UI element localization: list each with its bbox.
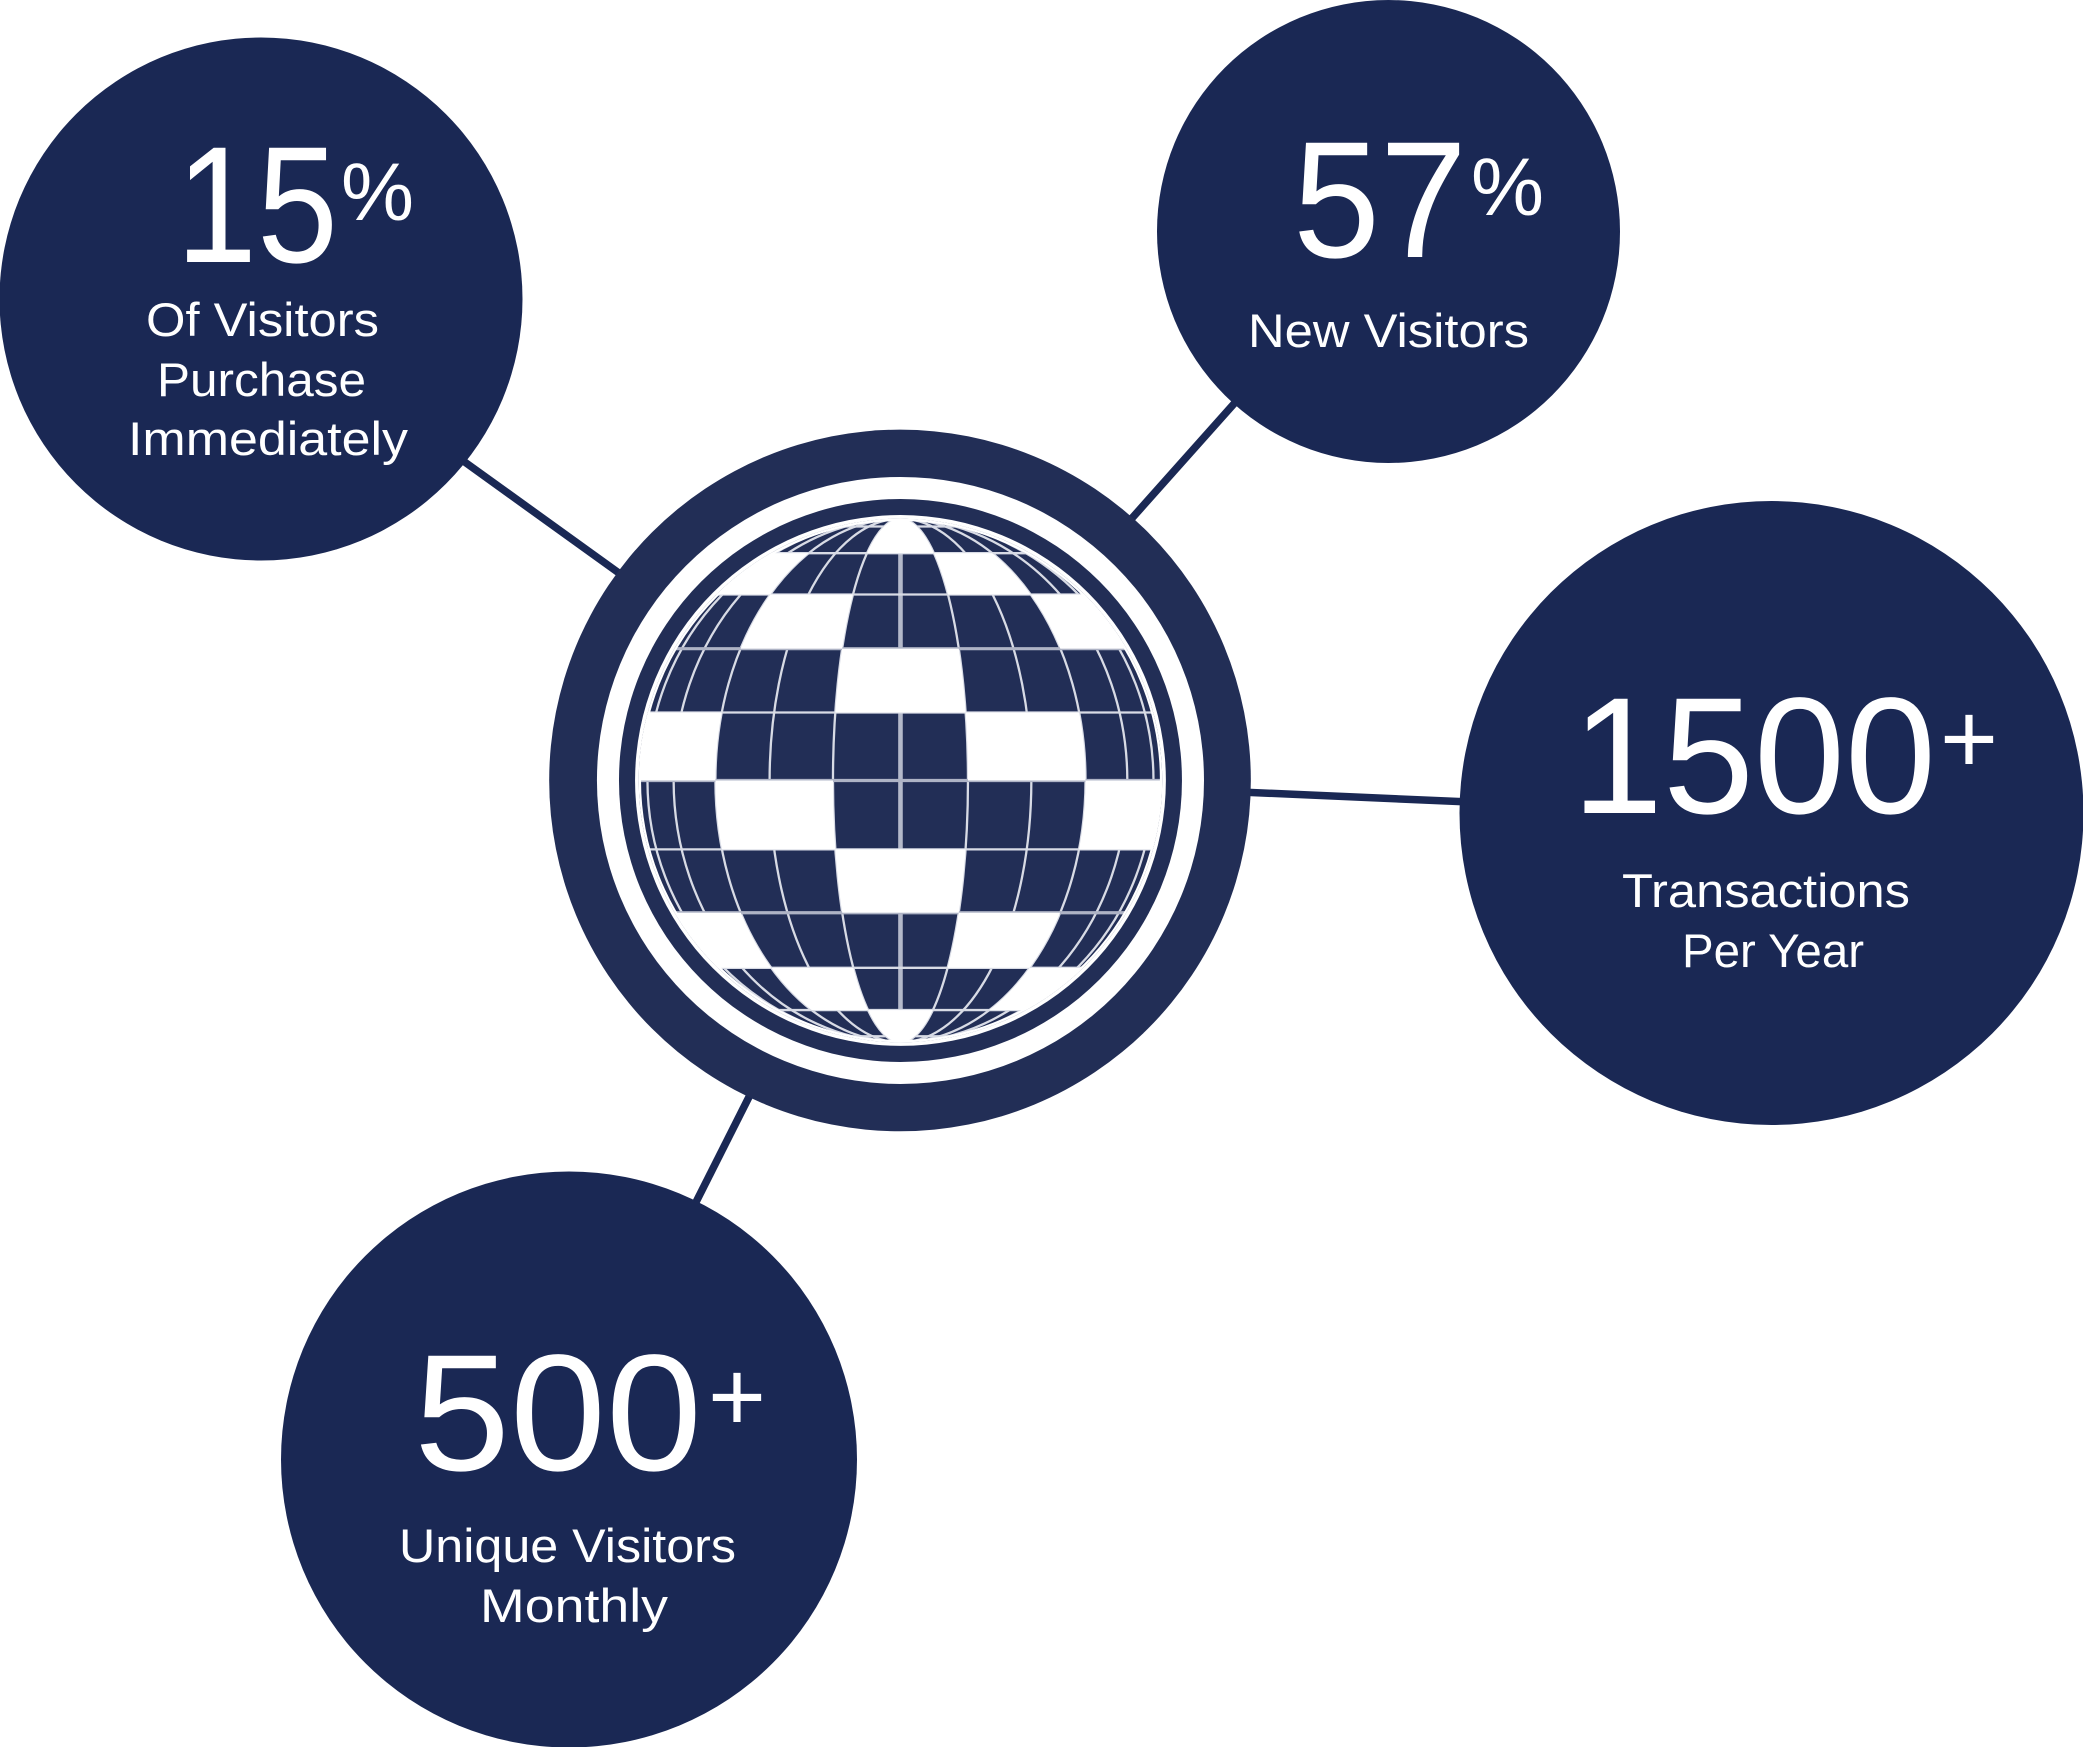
panel: 15% of visitors purchase immediately <box>0 38 522 560</box>
label: of visitors purchase immediately <box>128 293 409 465</box>
panel: 1500+ transactions per year <box>1460 501 2083 1125</box>
connector: 57% to globe <box>1125 397 1240 526</box>
label: transactions per year: Per Year <box>1682 924 1864 977</box>
connector: 15% to globe <box>455 455 630 581</box>
connector: 500+ to globe <box>690 1087 754 1214</box>
label: of visitors purchase immediately: Of Visitors <box>146 293 379 346</box>
label: of visitors purchase immediately: Purchase <box>157 353 366 406</box>
stat: 57%: 57 <box>1293 108 1467 293</box>
icon: central globe <box>549 430 1251 1131</box>
connector: 1500+ to globe <box>1240 792 1470 802</box>
stat: 1500+: + <box>1940 683 1998 795</box>
label: new visitors: New Visitors <box>1248 304 1529 357</box>
label: unique visitors monthly: Monthly <box>480 1579 669 1632</box>
stat: 1500+: 1500 <box>1572 664 1936 849</box>
label: transactions per year: Transactions <box>1622 864 1910 917</box>
stat: 500+: + <box>708 1341 766 1453</box>
label: of visitors purchase immediately: Immediately <box>128 412 409 465</box>
label: transactions per year <box>1622 864 1910 977</box>
stat: 57%: % <box>1471 142 1544 233</box>
panel: 57% new visitors <box>1157 0 1620 463</box>
panel: 500+ unique visitors monthly <box>281 1172 857 1747</box>
stat: 500+: 500 <box>414 1321 702 1506</box>
stat: 15%: 15 <box>176 113 338 298</box>
stat: 15%: % <box>341 147 414 238</box>
inner ring <box>619 499 1182 1062</box>
outer ring <box>549 430 1251 1131</box>
label: unique visitors monthly <box>399 1519 736 1632</box>
label: unique visitors monthly: Unique Visitors <box>399 1519 736 1572</box>
globe checker sphere <box>632 512 1169 1049</box>
